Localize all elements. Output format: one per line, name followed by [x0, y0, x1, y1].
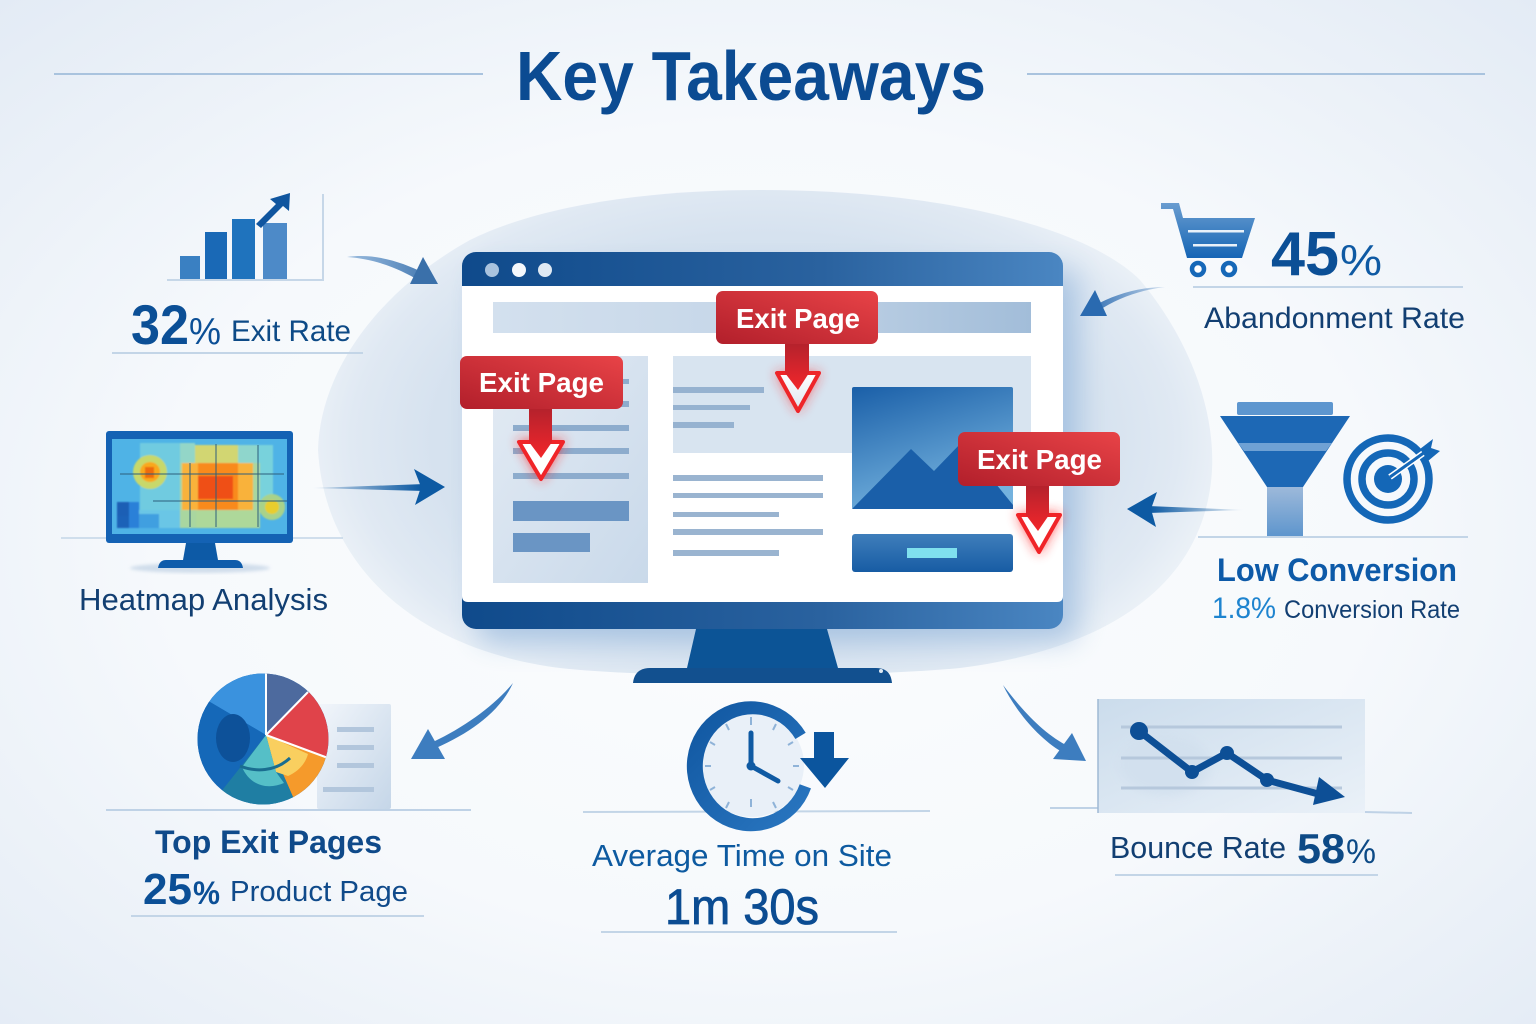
metric value: 1m 30s: [665, 879, 819, 935]
icon: heatmap monitor: [106, 431, 293, 573]
metric text: Conversion Rate: [1284, 596, 1460, 624]
metric text: 1.8%: [1212, 592, 1276, 625]
metric text: 58: [1297, 825, 1345, 872]
panel: heatmap analysis: [61, 431, 343, 617]
icon: shopping cart: [1161, 203, 1255, 275]
central monitor: [462, 252, 1078, 683]
label: Average Time on Site: [592, 838, 892, 873]
panel: low conversion: [1198, 402, 1468, 625]
image placeholder: [852, 387, 1013, 509]
heading: Low Conversion: [1217, 552, 1457, 588]
metric text: 45: [1271, 220, 1339, 289]
metric text: Product Page: [230, 876, 408, 908]
arrow: monitor to bounce rate: [1003, 685, 1086, 761]
exit page marker: right: [958, 432, 1120, 555]
exit page marker: left: [460, 356, 623, 482]
window dots: [485, 263, 552, 277]
arrow: conversion to monitor: [1127, 492, 1245, 527]
metric text: [1110, 825, 1376, 872]
icon: clock: [687, 701, 849, 831]
title: Key Takeaways: [516, 37, 986, 115]
exit page marker: top: Exit Page: [736, 303, 860, 334]
metric text: [1212, 592, 1460, 625]
arrow: heatmap to monitor: [313, 469, 445, 505]
metric text: 32: [131, 293, 189, 356]
background blob behind monitor: [318, 190, 1212, 676]
arrow: monitor to top exit pages: [411, 683, 513, 759]
icon: bar chart: [167, 193, 323, 280]
icon: document: [317, 704, 391, 809]
arrow: exit rate to monitor: [347, 256, 438, 284]
metric text: %: [1340, 236, 1382, 285]
metric text: Bounce Rate: [1110, 830, 1286, 865]
arrow: abandonment to monitor: [1080, 287, 1165, 316]
panel: exit rate: [112, 193, 363, 356]
middle column: [673, 356, 1031, 556]
metric text: %: [189, 311, 221, 353]
icon: line chart: [1098, 699, 1365, 813]
left column: [493, 356, 648, 583]
panel: average time on site: [583, 701, 930, 935]
exit page marker: left: Exit Page: [479, 367, 604, 398]
metric text: %: [1346, 833, 1376, 871]
metric text: 25: [143, 865, 192, 914]
heading: Top Exit Pages: [155, 824, 382, 860]
icon: target: [1347, 438, 1440, 520]
panel: abandonment rate: Abandonment Rate: [1204, 302, 1465, 335]
exit page marker: right: Exit Page: [977, 444, 1102, 475]
metric text: [143, 865, 408, 914]
panel: top exit pages: [106, 660, 471, 916]
icon: pie chart: [198, 674, 328, 804]
page button: [852, 534, 1013, 572]
top strip: [493, 302, 1031, 333]
panel: abandonment rate: [1161, 203, 1465, 335]
metric text: [131, 293, 351, 356]
panel: bounce rate: [1050, 699, 1412, 875]
exit page marker: top: [716, 291, 878, 413]
metric text: Exit Rate: [231, 315, 351, 348]
metric text: [1271, 220, 1382, 289]
label: Heatmap Analysis: [79, 582, 328, 617]
icon: funnel: [1220, 402, 1350, 537]
metric text: %: [193, 875, 220, 911]
